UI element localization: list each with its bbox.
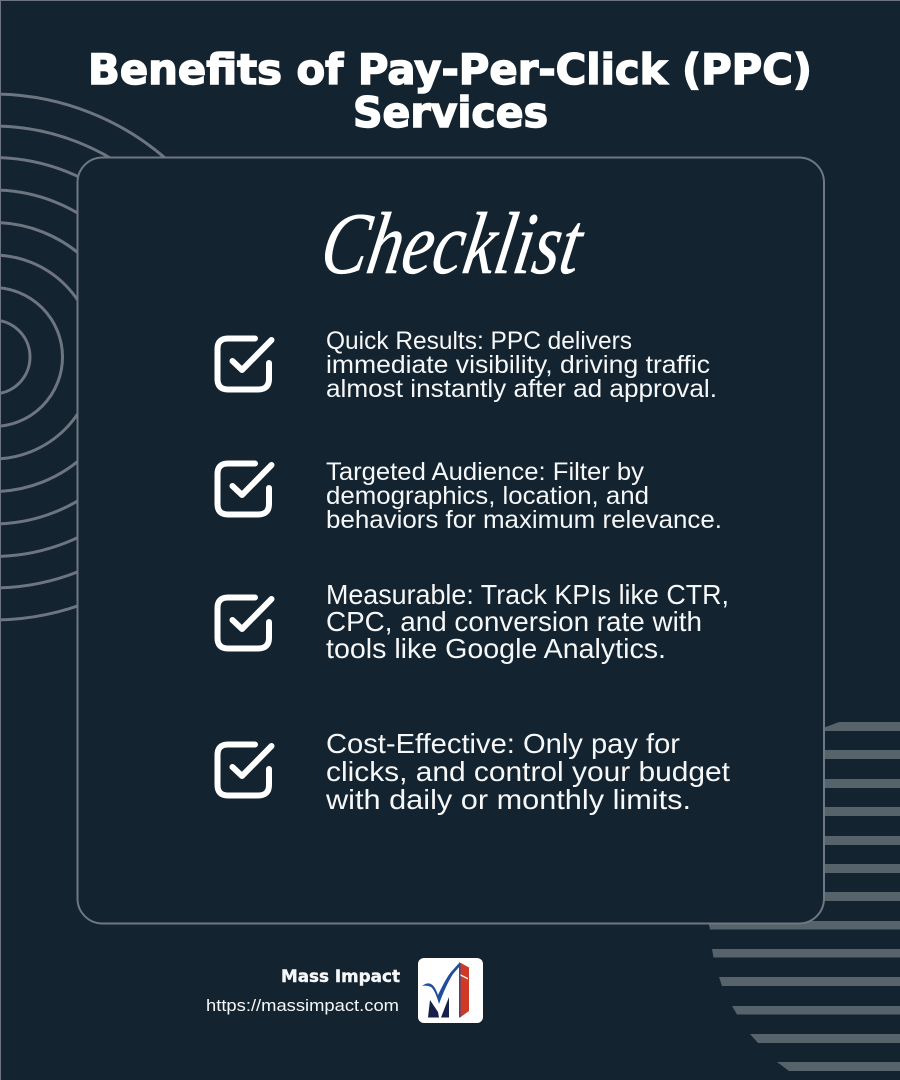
title: [88, 45, 812, 137]
text: measurable: Measurable: Track KPIs like CTR,: [326, 579, 729, 610]
text: targeted audience: [326, 458, 722, 534]
text: cost-effective: clicks, and control your budget: [326, 756, 730, 787]
title: Benefits of Pay-Per-Click (PPC): [88, 45, 812, 94]
text: quick results: immediate visibility, driving traffic: [326, 351, 710, 379]
text: quick results: Quick Results: PPC delivers: [326, 327, 632, 355]
checklist item: measurable: [218, 579, 729, 664]
text: measurable: tools like Google Analytics.: [326, 633, 666, 664]
title: Services: [353, 88, 548, 137]
icon: checkbox: [218, 598, 272, 648]
text: measurable: CPC, and conversion rate with: [326, 606, 702, 637]
text: quick results: almost instantly after ad approval.: [326, 375, 717, 403]
text: quick results: [326, 327, 717, 403]
text: measurable: [326, 579, 729, 664]
text: cost-effective: Cost-Effective: Only pay for: [326, 728, 680, 759]
checklist heading: Checklist: [315, 196, 591, 293]
icon: checkbox: [218, 464, 272, 514]
icon: checkbox: [218, 744, 272, 796]
checklist item: targeted audience: [218, 458, 722, 534]
text: targeted audience: demographics, location, and: [326, 482, 649, 510]
text: cost-effective: with daily or monthly limits.: [325, 784, 691, 815]
text: cost-effective: [325, 728, 730, 815]
icon: checkbox: [218, 338, 272, 390]
checklist item: quick results: [218, 327, 717, 403]
icon: Mass Impact logo: [418, 958, 483, 1023]
decorative horizontal stripes: [708, 722, 900, 1071]
footer url: https://massimpact.com: [206, 997, 399, 1015]
footer brand name: Mass Impact: [281, 967, 400, 986]
text: targeted audience: Targeted Audience: Filter by: [326, 458, 645, 486]
checklist item: cost-effective: [218, 728, 730, 815]
decorative concentric circles: [0, 94, 256, 620]
text: targeted audience: behaviors for maximum relevance.: [326, 506, 722, 534]
panel: checklist card: [78, 158, 824, 924]
